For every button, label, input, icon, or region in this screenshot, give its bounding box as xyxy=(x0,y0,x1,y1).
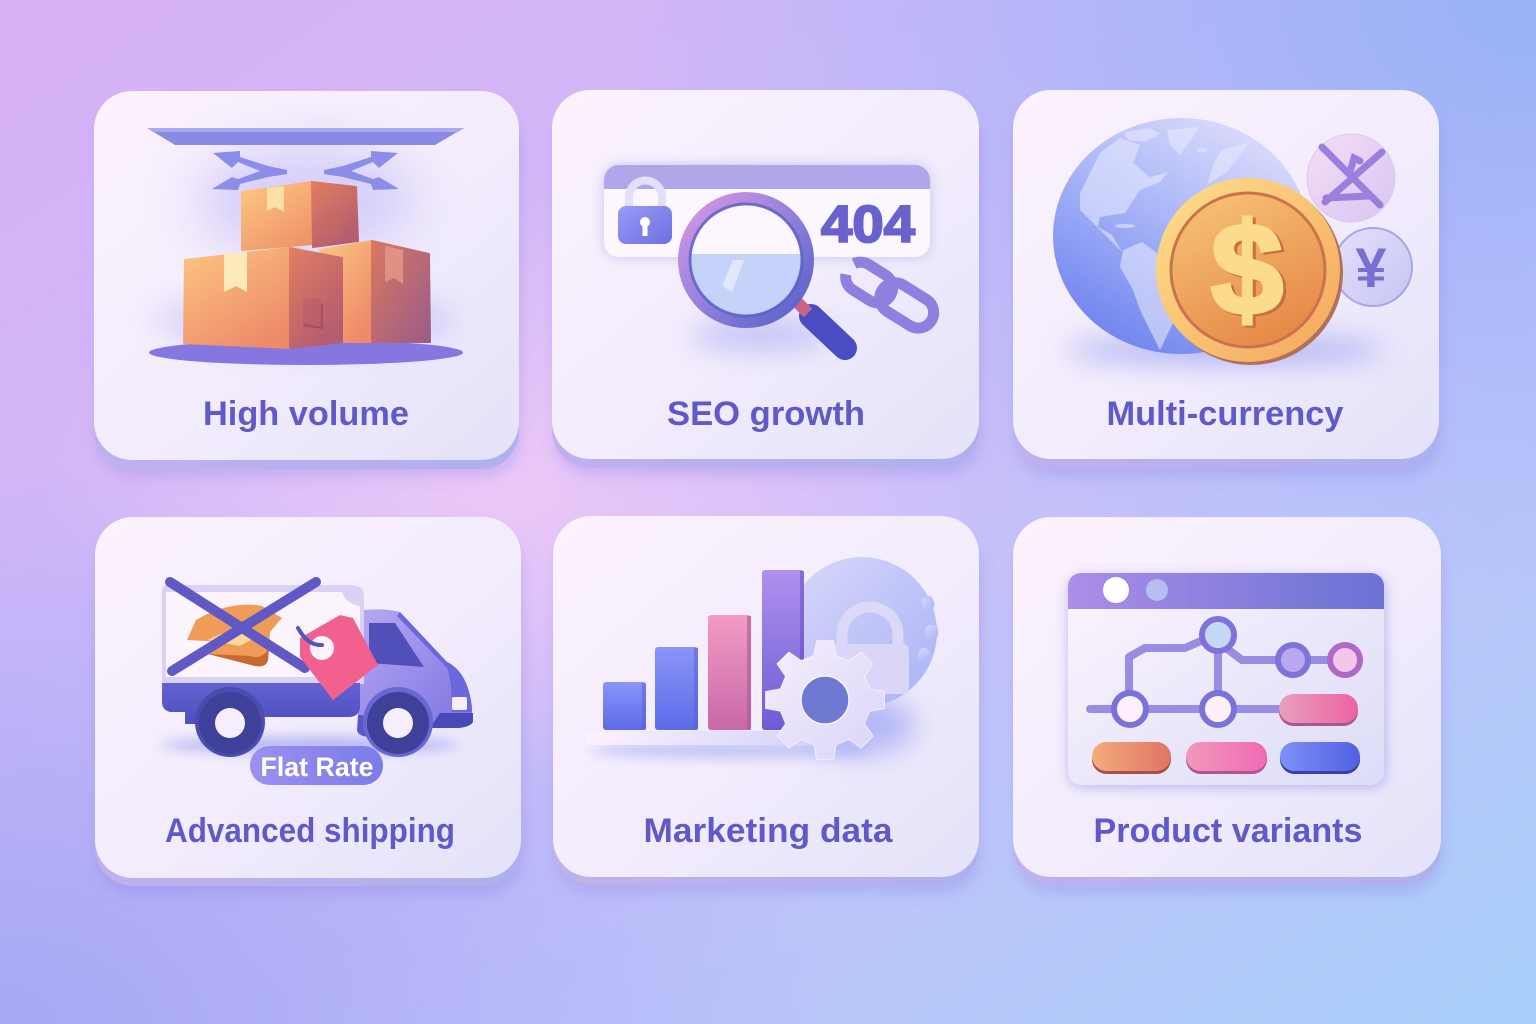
text: 404: 404 xyxy=(821,196,915,254)
padlock xyxy=(815,607,909,694)
wheels xyxy=(195,687,433,757)
badge: Flat Rate xyxy=(250,746,383,785)
back gear xyxy=(787,557,938,707)
variant nodes xyxy=(1114,619,1360,725)
icon: browser bar with magnifier and broken link xyxy=(604,165,940,349)
icon: bar chart with gears and lock xyxy=(585,557,938,759)
icon: delivery truck with flat rate tag xyxy=(160,582,473,785)
icon: dollar coin xyxy=(1156,178,1343,365)
panel: Advanced shipping xyxy=(95,517,521,886)
badge: Flat Rate: Flat Rate xyxy=(260,752,374,782)
front gear xyxy=(766,641,884,759)
truck cargo box xyxy=(162,585,364,684)
panel: Product variants xyxy=(1013,517,1441,885)
icon: globe xyxy=(1053,118,1309,354)
icon: dollar coin: $ xyxy=(1211,196,1283,342)
label: High volume xyxy=(203,395,409,433)
icon: magnifying glass xyxy=(678,192,845,348)
variant pills xyxy=(1092,694,1360,774)
variant connector lines xyxy=(1090,637,1345,709)
truck cab xyxy=(358,609,472,727)
icon: variant tree window xyxy=(1068,573,1386,788)
label: Advanced shipping xyxy=(165,812,455,850)
label: Product variants xyxy=(1094,812,1362,850)
crossed out lines xyxy=(170,582,316,671)
icon: padlock xyxy=(618,180,672,244)
toast xyxy=(187,605,282,666)
panel: High volume xyxy=(94,91,519,469)
label: Multi-currency xyxy=(1106,395,1344,433)
icon: stacked boxes under shelf xyxy=(147,128,464,365)
icon: crossed currency coin xyxy=(1307,134,1395,222)
icon: globe with currency coins xyxy=(1053,118,1412,365)
price tag xyxy=(298,615,378,700)
panel: Marketing data xyxy=(553,516,979,885)
icon: broken chain xyxy=(840,257,940,334)
icon: yen coin xyxy=(1334,228,1412,306)
icon: dollar coin: $ xyxy=(1214,198,1286,344)
bar chart xyxy=(585,570,815,745)
label: SEO growth xyxy=(667,395,865,433)
icon: yen coin: ¥ xyxy=(1355,236,1387,299)
panel: Multi-currency xyxy=(1013,90,1439,468)
panel: SEO growth xyxy=(552,90,979,468)
label: Marketing data xyxy=(644,812,894,850)
